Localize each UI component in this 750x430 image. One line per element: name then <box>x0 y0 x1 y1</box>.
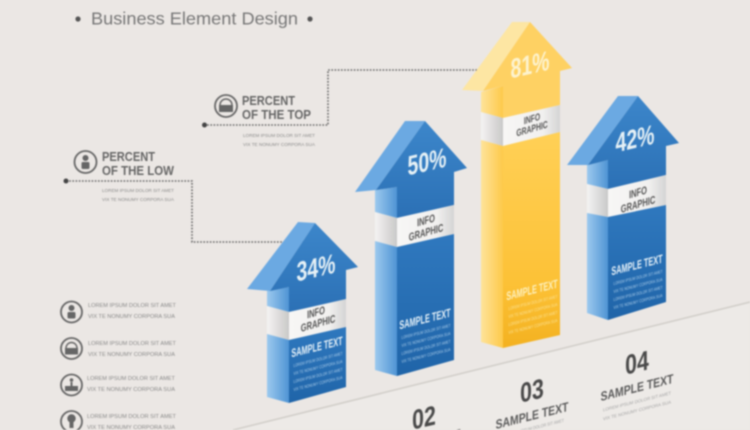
small text: top: LOREM IPSUM DOLOR SIT AMET <box>243 133 315 138</box>
arrow 3 body <box>462 22 572 348</box>
heading: percent of the low: OF THE LOW <box>102 164 174 178</box>
arrow 1 sample text: VIX TE NONUMY CORPORA SUA <box>294 375 343 392</box>
floor label 02 <box>388 401 461 430</box>
arrow 4 sample text: SAMPLE TEXT <box>611 253 663 279</box>
arrow 3 sample text: LOREM IPSUM DOLOR SIT AMET <box>508 294 558 311</box>
arrow 2 sample text: SAMPLE TEXT <box>399 307 451 333</box>
small text: low: VIX TE NONUMY CORPORA SUA <box>102 197 175 202</box>
list item 4 <box>61 411 177 430</box>
arrow 4 sample text: LOREM IPSUM DOLOR SIT AMET <box>614 269 663 286</box>
arrow 2 sample text: LOREM IPSUM DOLOR SIT AMET <box>402 323 451 340</box>
arrow 3 sample text: LOREM IPSUM DOLOR SIT AMET <box>508 310 558 327</box>
icon: person <box>74 151 96 173</box>
list item 1: VIX TE NONUMY CORPORA SUA <box>88 314 176 320</box>
arrow 3 info: INFO <box>524 110 540 127</box>
arrow 4 value: 42% <box>615 119 655 159</box>
arrow 4 sample text: VIX TE NONUMY CORPORA SUA <box>614 293 663 310</box>
arrow 1 body <box>247 222 358 403</box>
list item 2: VIX TE NONUMY CORPORA SUA <box>88 352 176 358</box>
arrow 3 sample text <box>506 278 558 335</box>
list item 3: VIX TE NONUMY CORPORA SUA <box>87 387 176 393</box>
list item 2: LOREM IPSUM DOLOR SIT AMET <box>88 341 177 347</box>
arrow 3 value: 81% <box>510 45 550 85</box>
arrow 2 body <box>355 121 467 376</box>
heading: percent of the low: PERCENT <box>102 150 155 164</box>
dotted connector: low <box>66 181 316 242</box>
floor label 03: 03 <box>520 374 544 409</box>
arrow 2 info <box>409 212 443 244</box>
small text: top: VIX TE NONUMY CORPORA SUA <box>243 142 316 147</box>
floor area <box>233 302 750 430</box>
arrow 4 info: INFO <box>629 184 647 202</box>
heading: percent of the top: OF THE TOP <box>242 108 311 122</box>
list item 1: LOREM IPSUM DOLOR SIT AMET <box>88 303 177 309</box>
arrow 2 value: 50% <box>407 142 447 182</box>
arrow 1 info: INFO <box>307 304 325 322</box>
arrow 2 sample text: LOREM IPSUM DOLOR SIT AMET <box>402 339 451 356</box>
arrow 4 info: GRAPHIC <box>621 194 655 216</box>
icon: bag <box>215 95 237 117</box>
floor label 04: LOREM IPSUM DOLOR SIT AMET <box>603 391 671 412</box>
arrow 2 sample text <box>399 307 451 364</box>
arrow 4 body <box>567 96 679 320</box>
arrow 4 sample text <box>611 253 663 310</box>
arrow 3 sample text: SAMPLE TEXT <box>506 278 558 304</box>
arrow 1 value: 34% <box>296 248 336 288</box>
arrow 2 info: INFO <box>417 212 435 230</box>
arrow 1 sample text: LOREM IPSUM DOLOR SIT AMET <box>294 367 343 384</box>
list item 3: LOREM IPSUM DOLOR SIT AMET <box>87 376 176 382</box>
arrow 3 sample text: VIX TE NONUMY CORPORA SUA <box>508 302 558 319</box>
arrow 4: 42% <box>567 96 679 320</box>
arrow 3: 81% <box>462 22 572 348</box>
arrow 4 sample text: LOREM IPSUM DOLOR SIT AMET <box>614 285 663 302</box>
arrow 1 sample text: SAMPLE TEXT <box>291 335 343 361</box>
callout: percent of the low <box>64 150 316 242</box>
list item 1 <box>61 302 177 322</box>
small text: low: LOREM IPSUM DOLOR SIT AMET <box>102 188 174 193</box>
arrow 4 info <box>621 184 655 216</box>
arrow 1 info: GRAPHIC <box>301 313 335 335</box>
floor label 04: VIX TE NONUMY CORPORA SUA <box>603 399 672 421</box>
heading: percent of the top: PERCENT <box>242 94 295 108</box>
list item 4: LOREM IPSUM DOLOR SIT AMET <box>87 414 177 420</box>
arrow 1: 34% <box>247 222 358 403</box>
floor label 04: 04 <box>625 346 649 381</box>
list item 3 <box>61 374 176 396</box>
floor label 04: SAMPLE TEXT <box>601 371 674 404</box>
icon list <box>61 302 177 430</box>
dotted connector: top <box>204 70 502 125</box>
arrow 2 info: GRAPHIC <box>409 222 443 244</box>
arrow 3 sample text: VIX TE NONUMY CORPORA SUA <box>508 318 558 335</box>
floor label 03 <box>496 374 569 430</box>
arrow 2 sample text: VIX TE NONUMY CORPORA SUA <box>402 331 451 348</box>
arrow 2: 50% <box>355 121 467 376</box>
title: Business Element Design <box>91 8 298 28</box>
arrow 1 sample text <box>291 335 343 392</box>
arrow 2 sample text: VIX TE NONUMY CORPORA SUA <box>402 347 451 364</box>
arrow 4 sample text: VIX TE NONUMY CORPORA SUA <box>614 277 663 294</box>
callout: percent of the top <box>202 70 502 147</box>
list item 2 <box>61 338 177 359</box>
arrow 1 sample text: LOREM IPSUM DOLOR SIT AMET <box>294 351 343 368</box>
arrow 3 info: GRAPHIC <box>516 118 548 139</box>
floor label 04 <box>601 346 674 421</box>
arrow 1 sample text: VIX TE NONUMY CORPORA SUA <box>294 359 343 376</box>
